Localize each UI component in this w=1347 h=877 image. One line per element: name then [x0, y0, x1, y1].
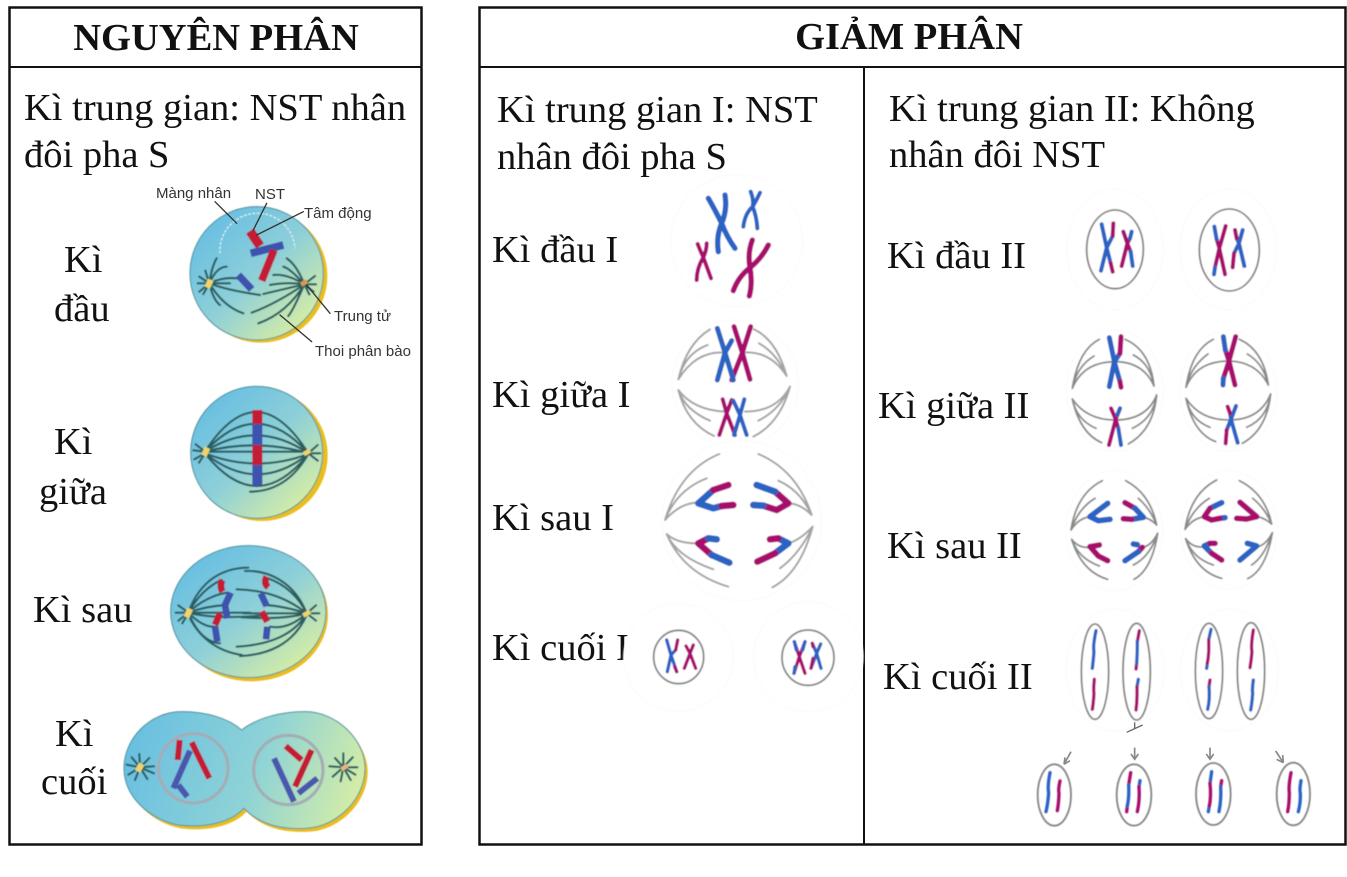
label: kì đầu: Kì [64, 239, 102, 281]
diagram: kì giữa I [672, 320, 798, 447]
diagram: telophase cell [124, 712, 368, 832]
label: kì cuối: cuối [41, 761, 107, 803]
text: kì trung gian II: Kì trung gian II: Không [889, 88, 1255, 130]
label: kì đầu: đầu [54, 288, 110, 330]
label: trung tử: Trung tử [334, 308, 391, 325]
label: kì sau II: Kì sau II [887, 525, 1022, 567]
diagram: kì cuối I, first cell [623, 603, 733, 711]
label: NST: NST [255, 186, 285, 203]
text: kì trung gian [24, 87, 406, 176]
diagram: kì giữa II, second cell [1180, 330, 1277, 451]
text: kì trung gian II: nhân đôi NST [889, 134, 1105, 176]
label: kì cuối: Kì [55, 713, 94, 755]
label: kì cuối II: Kì cuối II [883, 656, 1033, 698]
diagram: kì sau I [662, 441, 822, 601]
diagram: kì giữa II, first cell [1067, 330, 1163, 451]
label: kì cuối [41, 713, 107, 803]
label: kì giữa II: Kì giữa II [878, 385, 1029, 427]
label: kì đầu [54, 239, 110, 330]
heading: nguyên phân: NGUYÊN PHÂN [73, 17, 359, 59]
label: kì cuối I: Kì cuối I [492, 627, 629, 669]
label: kì giữa: giữa [39, 471, 107, 513]
label: tâm động: Tâm động [304, 205, 372, 222]
icon: arrows to gametes [1064, 722, 1283, 764]
label: kì sau: Kì sau [33, 589, 132, 631]
diagram: kì cuối II, four daughter cells [1066, 609, 1278, 731]
text: kì trung gian: đôi pha S [24, 134, 169, 176]
diagram: kì đầu I [671, 175, 803, 307]
text: kì trung gian I [497, 89, 818, 178]
diagram: kì đầu II, first cell [1067, 189, 1163, 310]
diagram: kì sau II, second cell [1181, 471, 1277, 589]
label: kì đầu I: Kì đầu I [492, 229, 618, 271]
label: màng nhân: Màng nhân [156, 185, 231, 202]
diagram: kì sau II, first cell [1066, 471, 1163, 591]
diagram: prophase cell [190, 202, 330, 343]
label: kì giữa [39, 421, 107, 513]
panel: giảm phân [479, 8, 1346, 844]
text: kì trung gian I: Kì trung gian I: NST [497, 89, 818, 131]
label: kì sau I: Kì sau I [492, 497, 614, 539]
panel: nguyên phân [9, 8, 422, 844]
diagram: gamete cells [1038, 763, 1310, 826]
text: kì trung gian: Kì trung gian: NST nhân [24, 87, 406, 129]
diagram: metaphase cell [191, 386, 328, 521]
label: thoi phân bào: Thoi phân bào [315, 343, 411, 360]
label: kì đầu II: Kì đầu II [887, 235, 1026, 277]
diagram: kì cuối I, second cell [753, 602, 863, 712]
heading: giảm phân: GIẢM PHÂN [795, 16, 1023, 58]
diagram: anaphase cell [171, 546, 328, 681]
text: kì trung gian I: nhân đôi pha S [497, 136, 727, 178]
label: kì giữa I: Kì giữa I [492, 374, 630, 416]
label: kì giữa: Kì [54, 421, 92, 463]
diagram: kì đầu II, second cell [1180, 189, 1277, 310]
text: kì trung gian II [889, 88, 1255, 176]
